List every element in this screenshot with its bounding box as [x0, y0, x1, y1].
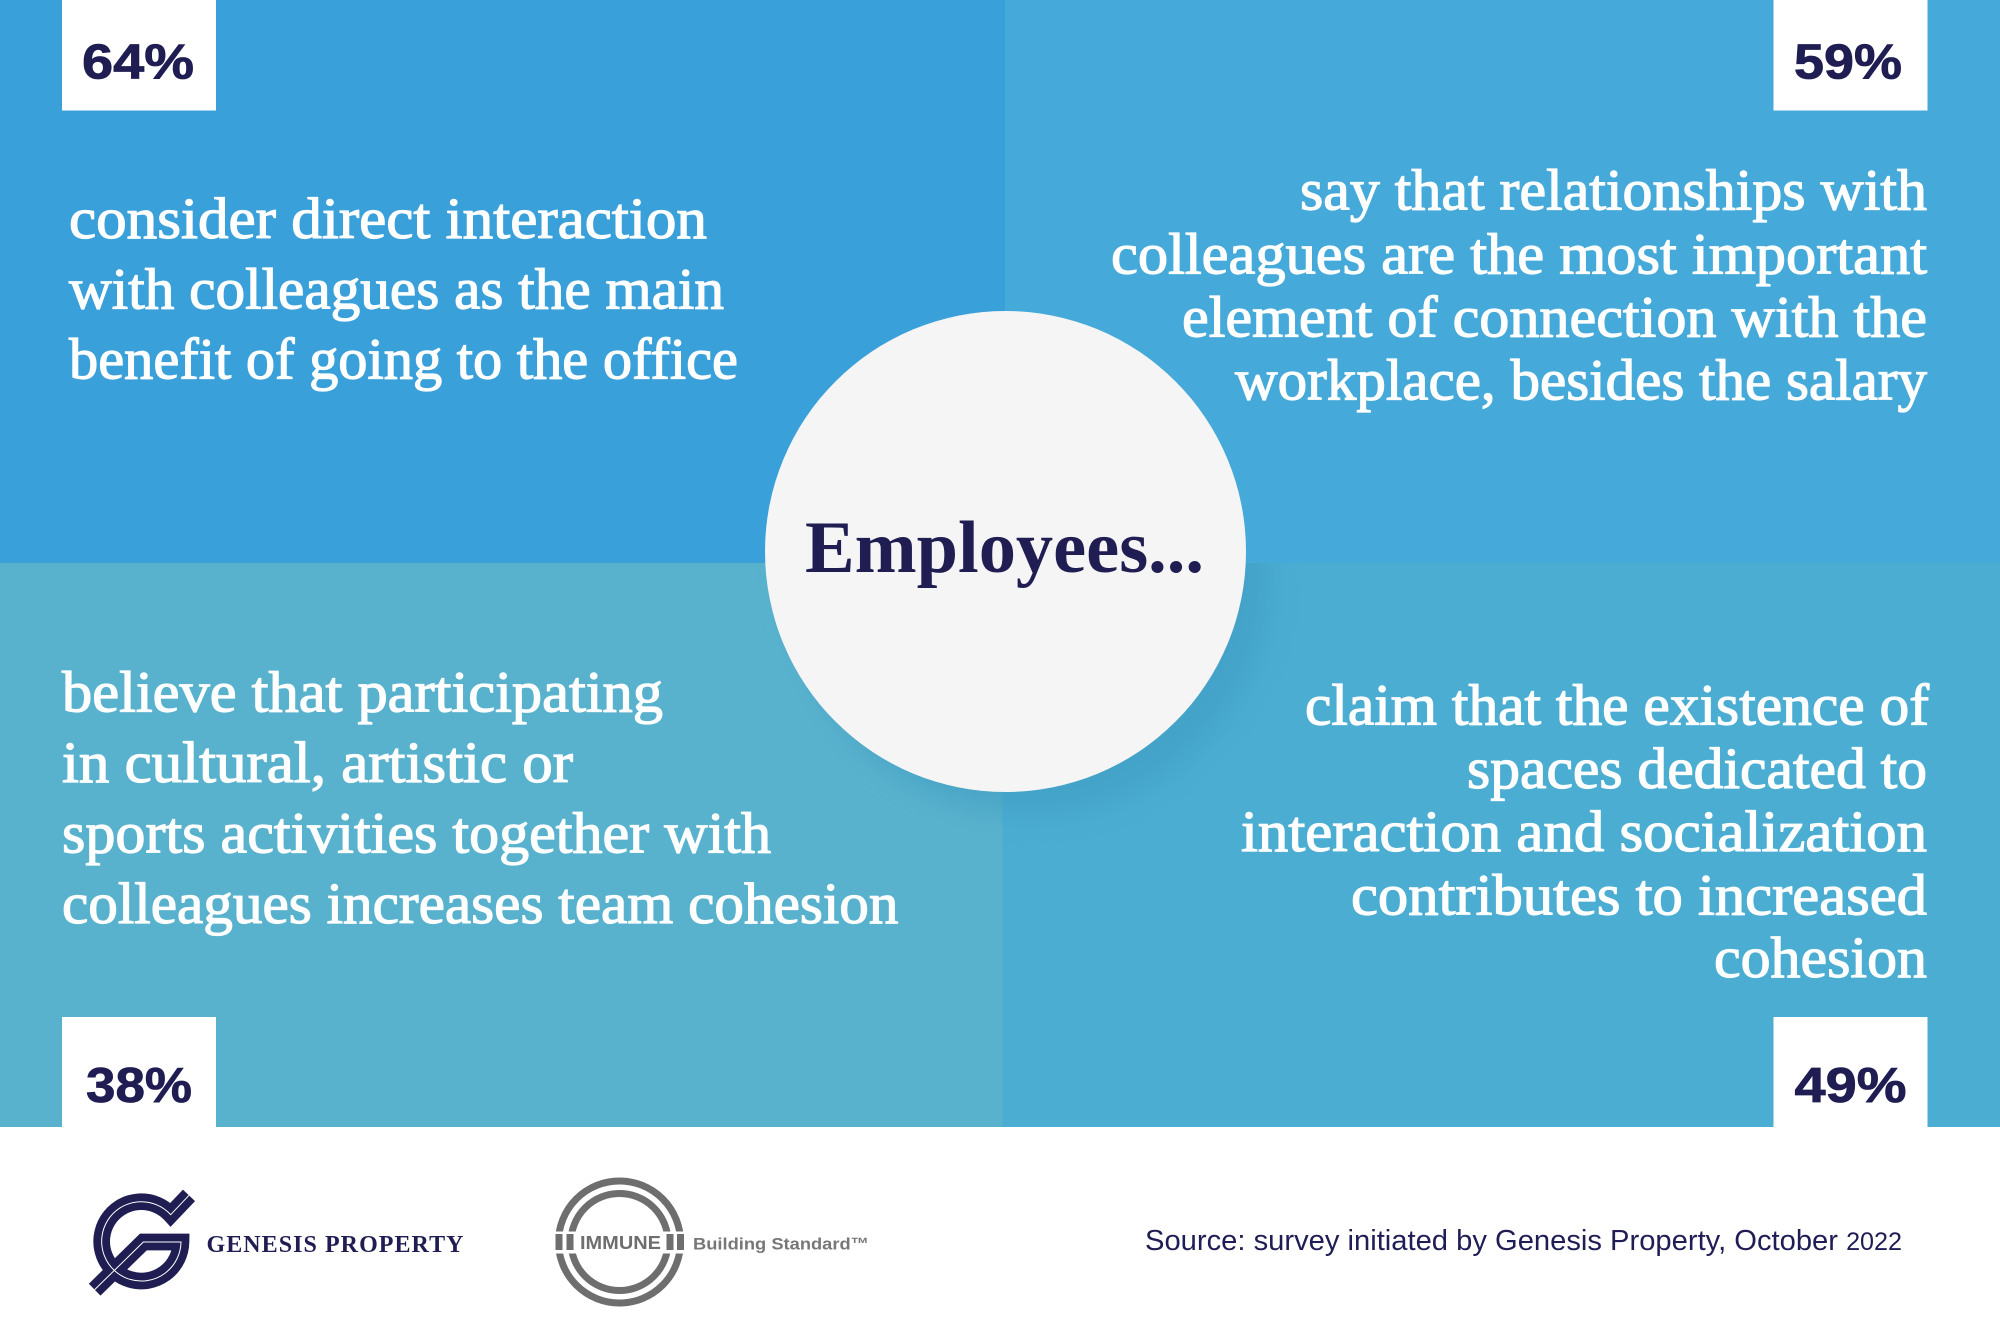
text: dedicated spaces: claim that the existence of [1305, 672, 1930, 738]
text: direct interaction: with colleagues as the main [69, 256, 724, 322]
text: dedicated spaces: spaces dedicated to [1467, 736, 1927, 801]
badge: 59% [1774, 0, 1928, 110]
panel background: bottom right [1002, 563, 2000, 1127]
text: dedicated spaces [1241, 672, 1930, 990]
panel: top left 64% [0, 0, 1005, 563]
text: direct interaction: consider direct interaction [69, 186, 707, 251]
icon: IMMUNE rings: IMMUNE [580, 1233, 661, 1253]
text: direct interaction [69, 186, 738, 392]
badge: 38%: 38% [86, 1059, 192, 1113]
text: relationships: colleagues are the most important [1111, 222, 1927, 286]
badge: 49%: 49% [1794, 1059, 1906, 1113]
text: relationships: workplace, besides the salary [1235, 348, 1927, 412]
icon: Genesis G mark [95, 1195, 189, 1290]
text: Building Standard: Building Standard™ [693, 1234, 869, 1254]
text: team cohesion: sports activities together with [62, 800, 771, 866]
logo: Genesis Property [95, 1195, 464, 1290]
text: team cohesion: believe that participating [62, 660, 663, 724]
text: dedicated spaces: interaction and socialization [1241, 799, 1927, 864]
panel background: top right [1005, 0, 2000, 563]
text: relationships: element of connection with the [1182, 284, 1927, 350]
source note: Source: survey initiated by Genesis Property, October 2022 [1145, 1225, 1902, 1257]
text: team cohesion: in cultural, artistic or [62, 730, 573, 795]
panel: bottom right 49% [1002, 563, 2000, 1127]
text: relationships [1111, 158, 1927, 412]
text: Genesis Property: GENESIS PROPERTY [206, 1232, 464, 1258]
text: relationships: say that relationships with [1300, 158, 1927, 222]
icon: IMMUNE rings [550, 1181, 690, 1303]
text: dedicated spaces: contributes to increased [1351, 862, 1927, 928]
center circle: Employees [765, 311, 1246, 792]
text: team cohesion: colleagues increases team cohesion [62, 871, 898, 936]
logo: IMMUNE Building Standard [550, 1181, 869, 1303]
badge: 38% [62, 1017, 216, 1127]
panel: bottom left 38% [0, 563, 1002, 1127]
panel: top right 59% [1005, 0, 2000, 563]
text: team cohesion [62, 660, 898, 936]
badge: 49% [1774, 1017, 1928, 1127]
center circle shadow [856, 563, 1260, 814]
panel background: top left [0, 0, 1005, 563]
text: dedicated spaces: cohesion [1714, 925, 1927, 990]
badge: 64%: 64% [82, 36, 194, 90]
heading: Employees: Employees... [805, 507, 1204, 589]
text: direct interaction: benefit of going to the office [69, 326, 738, 392]
badge: 64% [62, 0, 216, 110]
badge: 59%: 59% [1794, 36, 1902, 90]
panel background: bottom left [0, 563, 1002, 1127]
